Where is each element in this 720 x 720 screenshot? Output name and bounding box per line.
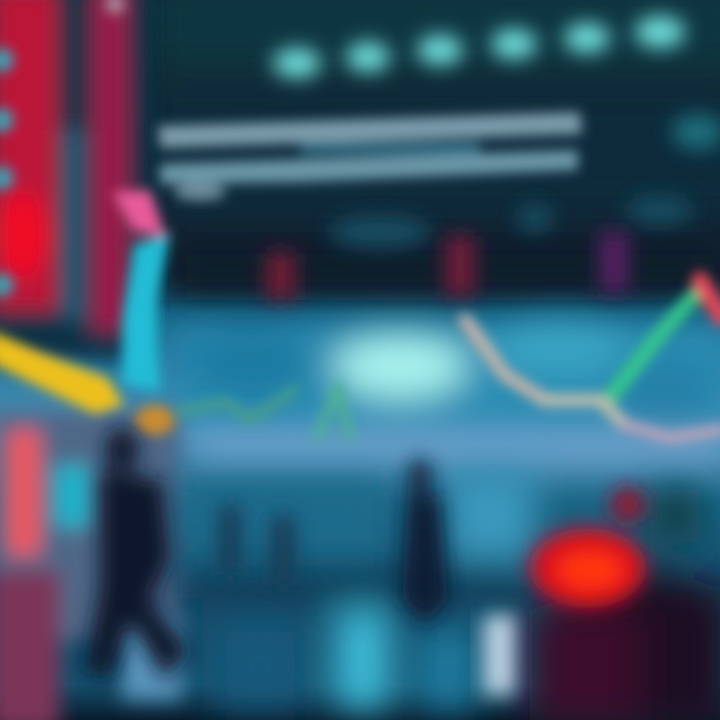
panel: glowing chart band	[175, 319, 720, 464]
panel: street reflections	[180, 470, 535, 710]
icon: left sign dots	[0, 0, 125, 297]
icon: glowing red light	[530, 487, 646, 608]
icon: dim background figures	[218, 505, 296, 585]
icon: cyan vertical sign	[112, 190, 170, 392]
icon: white floor reflection	[484, 615, 518, 695]
panel: upper dark wall	[150, 0, 720, 300]
text block: blurred headline	[158, 112, 582, 201]
heading row: six glowing dots	[273, 16, 685, 78]
icon: upper right glow	[328, 114, 720, 248]
panel: dark lower-right vehicle	[530, 490, 720, 720]
icon: walking silhouette centre	[402, 460, 448, 625]
panel: left storefront	[0, 0, 150, 360]
panel: lower left shop	[0, 410, 182, 720]
line chart: multicolour trend line	[180, 280, 720, 438]
icon: walking silhouette left	[85, 428, 190, 680]
bar chart: dim red candles	[266, 232, 628, 300]
icon: yellow awning streak	[0, 330, 175, 435]
